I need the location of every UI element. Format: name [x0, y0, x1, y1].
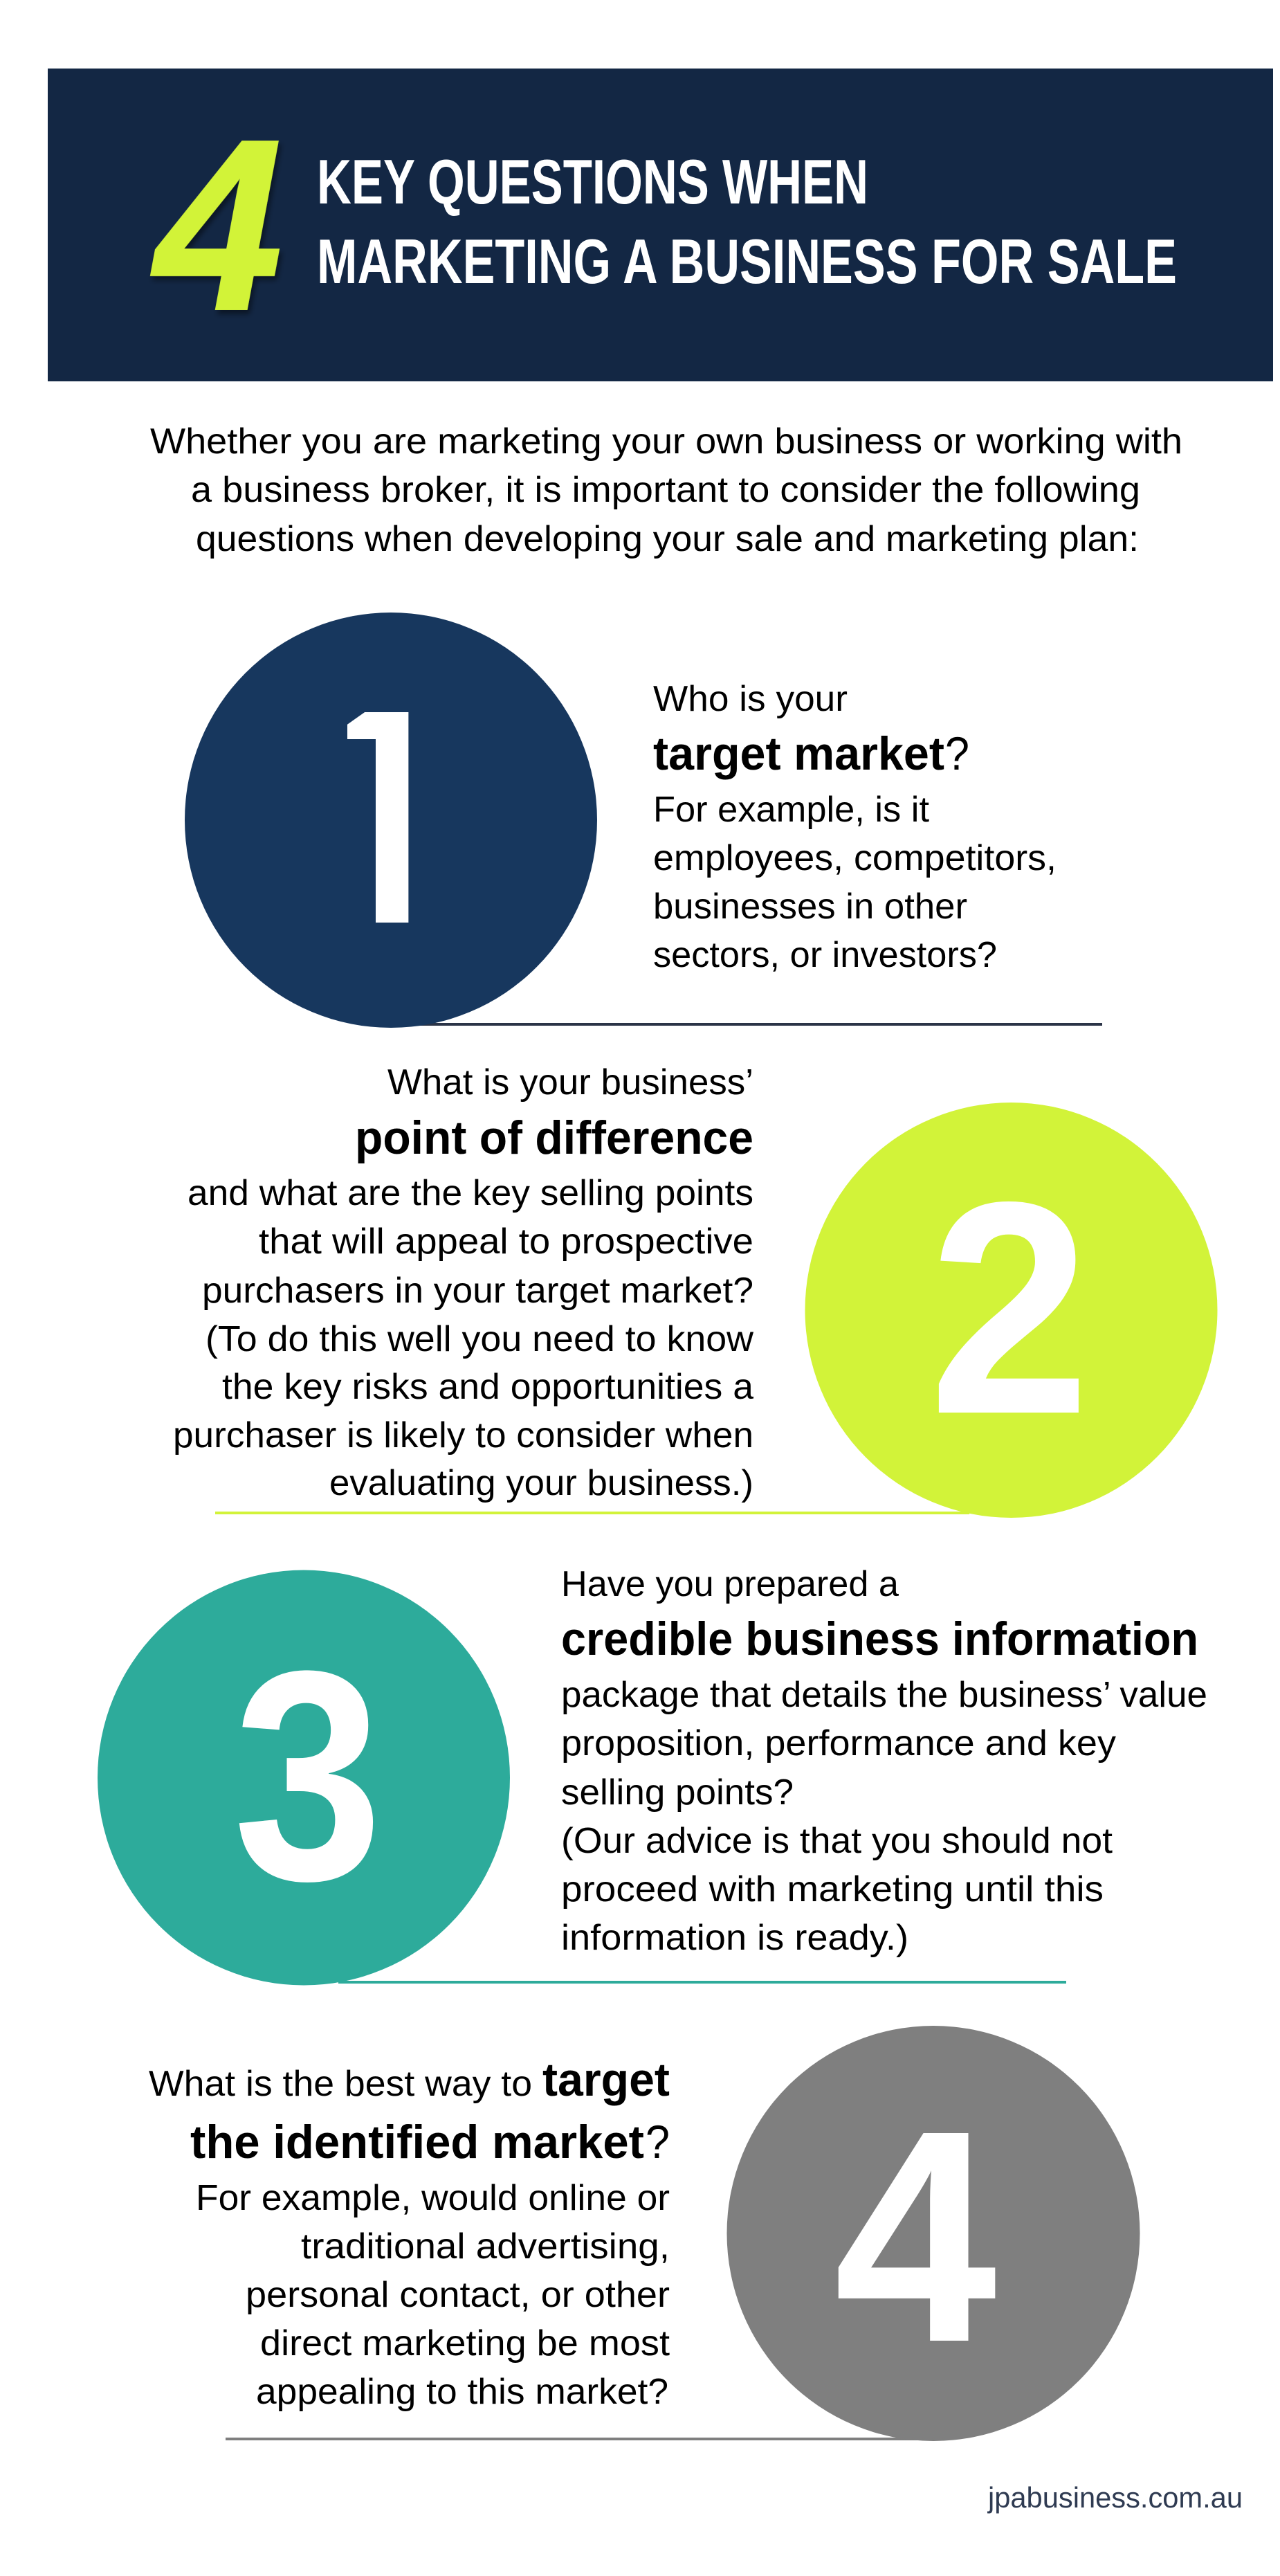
divider line 4 [226, 2438, 917, 2440]
numeral 1: 1 [284, 633, 471, 1042]
footer website: jpabusiness.com.au [987, 2481, 1243, 2514]
text: question 1: Who is your [653, 679, 848, 719]
divider line 1 [416, 1023, 1102, 1026]
text: question 3: proceed with marketing until this [561, 1869, 1104, 1910]
text: question 4: personal contact, or other [246, 2275, 670, 2315]
text: question 4: the identified market [190, 2116, 644, 2168]
text: question 4: traditional advertising, [301, 2226, 670, 2267]
panel: question 1 [185, 613, 1102, 1042]
text: question 1: For example, is it [653, 790, 930, 830]
title text: KEY QUESTIONS WHEN [317, 147, 868, 217]
circle 2 [805, 1103, 1218, 1518]
text: question 2: (To do this well you need to know [205, 1319, 753, 1359]
text: question 3: selling points? [561, 1772, 794, 1813]
text: question 2 [173, 1062, 753, 1503]
circle 4 [726, 2026, 1140, 2441]
text: question 4: What is the best way to [149, 2064, 532, 2104]
divider line 3 [338, 1981, 1066, 1984]
intro paragraph: Whether you are marketing your own business or working with [150, 421, 1182, 462]
circle 3 [98, 1570, 510, 1985]
text: question 1: ? [945, 727, 969, 780]
text: question 2: the key risks and opportunities a [222, 1367, 753, 1407]
text: question 2: point of difference [355, 1112, 753, 1164]
intro paragraph [150, 421, 1182, 559]
text: question 1: target market [653, 727, 944, 780]
numeral 2: 2 [929, 1139, 1090, 1477]
text: question 1 [653, 679, 1057, 975]
big lime numeral 4: 4 [132, 89, 311, 361]
text: question 2: purchasers in your target market? [202, 1271, 753, 1311]
intro paragraph: questions when developing your sale and marketing plan: [196, 519, 1139, 559]
text: question 1: sectors, or investors? [653, 935, 997, 975]
text: question 4: appealing to this market? [256, 2372, 668, 2412]
text: question 4: ? [646, 2116, 670, 2168]
text: question 3: package that details the business’ value [561, 1675, 1207, 1715]
numeral 3: 3 [233, 1609, 383, 1943]
intro paragraph: a business broker, it is important to consider the following [191, 470, 1140, 510]
text: question 4 [149, 2053, 670, 2412]
title text [317, 147, 1177, 297]
text: question 4: direct marketing be most [260, 2323, 670, 2364]
text: question 1: businesses in other [653, 887, 967, 927]
text: question 2: What is your business’ [387, 1062, 753, 1103]
panel: question 4 [149, 2026, 1140, 2441]
text: question 3: proposition, performance and key [561, 1723, 1116, 1763]
text: question 3 [561, 1564, 1207, 1958]
text: question 2: purchaser is likely to consider when [173, 1415, 753, 1455]
text: question 4: For example, would online or [196, 2178, 670, 2218]
text: question 4: target [542, 2053, 670, 2106]
divider line 2 [215, 1512, 969, 1514]
text: question 3: (Our advice is that you should not [561, 1821, 1113, 1861]
title banner [48, 69, 1273, 381]
text: question 3: credible business information [561, 1613, 1198, 1665]
panel: question 2 [173, 1062, 1218, 1518]
text: question 2: evaluating your business.) [329, 1463, 753, 1503]
text: question 2: and what are the key selling points [188, 1173, 753, 1213]
numeral 4: 4 [834, 2068, 998, 2405]
text: question 3: information is ready.) [561, 1918, 908, 1958]
panel: question 3 [98, 1564, 1207, 1985]
text: question 1: employees, competitors, [653, 838, 1057, 878]
text: question 3: Have you prepared a [561, 1564, 899, 1604]
text: question 2: that will appeal to prospective [259, 1222, 753, 1262]
circle 1 [185, 613, 597, 1028]
